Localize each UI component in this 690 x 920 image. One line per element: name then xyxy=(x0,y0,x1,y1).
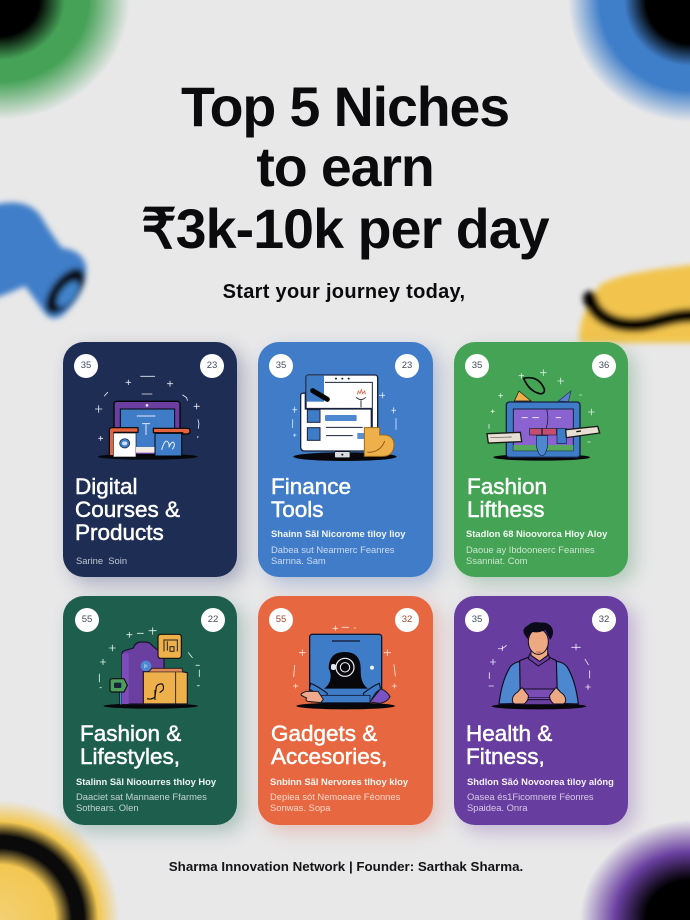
panel: Fashion & Lifestyles xyxy=(63,596,237,825)
icon: laptop with course cards xyxy=(95,376,200,460)
badge right: 32 xyxy=(402,614,412,625)
badge right xyxy=(592,354,616,378)
icon: person holding tablet xyxy=(488,622,591,710)
decoration: green and black top-left xyxy=(0,0,135,125)
description bold: Stadlon 68 Nioovorca Hloy Aloy xyxy=(466,528,607,539)
heading: Products xyxy=(75,520,164,545)
heading: Finance xyxy=(271,474,351,499)
heading: Gadgets & xyxy=(271,721,377,746)
heading: Courses & xyxy=(75,497,180,522)
description xyxy=(271,544,394,566)
decoration: yellow and black right xyxy=(579,264,690,343)
badge right xyxy=(592,608,616,632)
heading: Fitness, xyxy=(466,744,545,769)
description: Daaciet sat Mannaene Ffarmes xyxy=(76,791,207,802)
heading: Lifthess xyxy=(467,497,545,522)
title xyxy=(141,76,550,260)
badge right xyxy=(395,354,419,378)
heading xyxy=(466,721,552,769)
badge left: 55 xyxy=(82,614,92,625)
description: Spaidea. Onra xyxy=(467,802,527,813)
heading xyxy=(75,474,180,545)
badge left xyxy=(269,608,293,632)
heading xyxy=(467,474,547,522)
heading: Lifestyles, xyxy=(80,744,180,769)
badge left: 35 xyxy=(81,360,91,371)
badge left xyxy=(269,354,293,378)
badge right xyxy=(201,608,225,632)
panel: Gadgets & Accesories xyxy=(258,596,433,825)
heading: Digital xyxy=(75,474,138,499)
description: Oasea és1Ficomnere Féonres xyxy=(467,791,594,802)
decoration: yellow and black ring bottom-left xyxy=(0,795,125,920)
heading xyxy=(80,721,182,769)
icon: fashion screen xyxy=(486,369,600,461)
icon: finance dashboard xyxy=(292,374,397,461)
badge left: 55 xyxy=(276,614,286,625)
icon: shopping bag and parcel xyxy=(98,627,200,709)
badge right: 23 xyxy=(207,360,217,371)
heading: Fashion xyxy=(467,474,547,499)
decoration: blue tube left xyxy=(0,203,92,320)
heading: Fashion & xyxy=(80,721,181,746)
footer: Sharma Innovation Network | Founder: Sarthak Sharma. xyxy=(169,859,523,874)
badge right xyxy=(395,608,419,632)
icon: gadget screen with webcam xyxy=(293,626,397,710)
decoration: blue and black top-right xyxy=(565,0,690,125)
description: Sothears. Olen xyxy=(76,802,139,813)
description bold: Shdlon Sãó Novoorea tìloy alóng xyxy=(467,776,614,787)
title: Top 5 Niches xyxy=(181,76,509,138)
decoration: purple and black bottom-right xyxy=(578,818,690,920)
description: Sonwas. Sopa xyxy=(270,802,330,813)
heading: Health & xyxy=(466,721,552,746)
badge left: 35 xyxy=(472,360,482,371)
description: Daoue ay Ibdooneerc Feannes xyxy=(466,544,595,555)
description bold: Stalinn Sãl Nioourres thloy Hoy xyxy=(76,776,216,787)
title: ₹3k-10k per day xyxy=(141,198,549,260)
heading xyxy=(271,474,351,522)
panel: Health & Fitness xyxy=(454,596,628,825)
description xyxy=(466,544,595,566)
heading xyxy=(270,721,387,769)
description: Dabea sut Nearmerc Feanres xyxy=(271,544,394,555)
heading: Tools xyxy=(271,497,324,522)
description: Ssanniat. Com xyxy=(466,555,528,566)
badge left xyxy=(74,354,98,378)
description: Sarnna. Sam xyxy=(271,555,326,566)
badge right: 36 xyxy=(599,360,609,371)
badge right: 32 xyxy=(599,614,609,625)
badge left xyxy=(465,608,489,632)
panel: Finance Tools xyxy=(258,342,433,577)
panel: Fashion Lifthess xyxy=(454,342,628,577)
description xyxy=(76,791,207,813)
heading: Accesories, xyxy=(271,744,387,769)
description: Depiea sót Nemoeare Féonnes xyxy=(270,791,400,802)
badge left: 35 xyxy=(276,360,286,371)
description xyxy=(270,791,400,813)
badge right: 23 xyxy=(402,360,412,371)
description bold: Snbinn Sãl Nervores tlhoy kloy xyxy=(270,776,408,787)
badge left: 35 xyxy=(472,614,482,625)
caption: Sarine Soin xyxy=(76,555,127,566)
badge right: 22 xyxy=(208,614,218,625)
title: to earn xyxy=(256,136,434,198)
description bold: Shainn Sãl Nicorome tìloy lìoy xyxy=(271,528,405,539)
badge left xyxy=(75,608,99,632)
subtitle: Start your journey today, xyxy=(223,281,465,303)
badge left xyxy=(465,354,489,378)
panel: Digital Courses & Products xyxy=(63,342,237,577)
description xyxy=(467,791,594,813)
badge right xyxy=(200,354,224,378)
